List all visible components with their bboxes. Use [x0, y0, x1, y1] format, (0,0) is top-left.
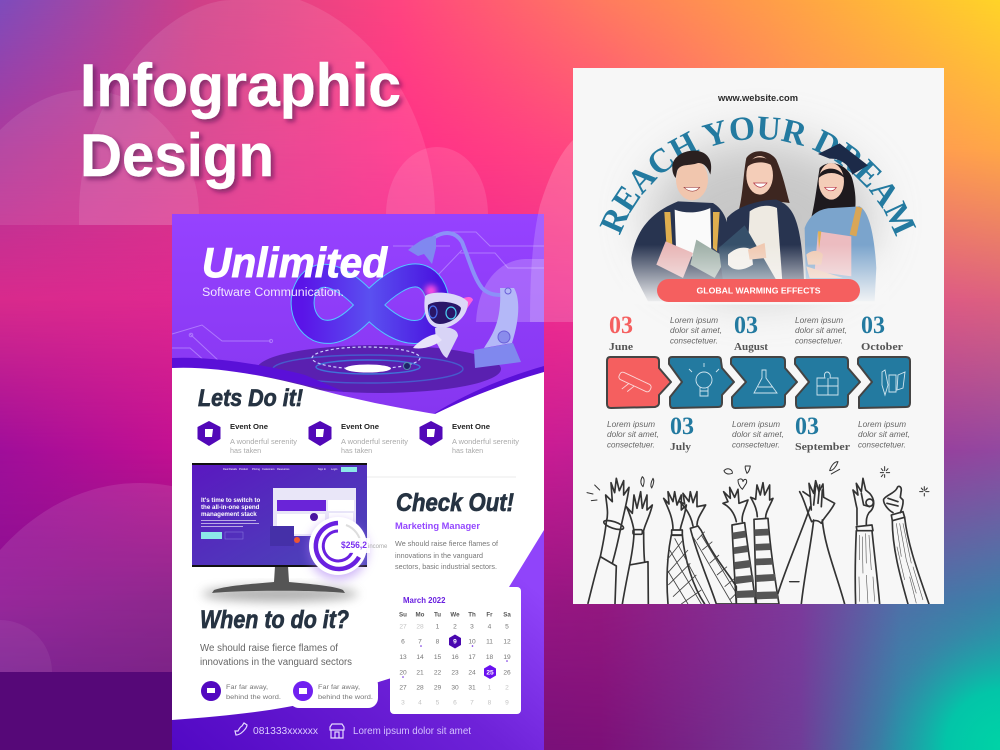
dates: 27 [399, 684, 407, 692]
screen text: Pricing [252, 467, 260, 471]
event two: A wonderful serenity [341, 437, 408, 446]
labels: bottom row: Lorem ipsum [858, 419, 906, 429]
income donut: income [368, 544, 388, 550]
screen text: Customers [262, 467, 275, 471]
dates: 1 [436, 624, 440, 630]
doodles [587, 462, 929, 501]
step: August [731, 357, 797, 408]
weekday header [399, 612, 511, 616]
labels: bottom row: Lorem ipsum [607, 419, 655, 429]
title [80, 52, 401, 189]
circuit lines [172, 232, 544, 362]
translucent arch [476, 259, 544, 322]
dates: 27 [399, 624, 407, 630]
dates: 9 [453, 638, 457, 646]
hand pair one [588, 478, 652, 604]
calendar: March 2022 [403, 596, 446, 605]
translucent arch behind right poster [530, 100, 640, 322]
body text [200, 643, 352, 668]
dates: 31 [468, 684, 476, 692]
photo: three students [623, 143, 890, 305]
subtitle: Software Communication. [202, 287, 344, 299]
labels: top row: dolor sit amet, [670, 325, 722, 335]
wave: dark band right [435, 366, 544, 414]
labels: top row: 03 [609, 312, 633, 339]
screen text: Resources [277, 467, 290, 471]
labels: bottom row: dolor sit amet, [732, 429, 784, 439]
lower left circle [0, 483, 320, 672]
labels: bottom row: 03 [670, 413, 694, 440]
dates: 30 [451, 684, 459, 692]
illustration: hologram platform [257, 345, 501, 393]
event one: Event One [230, 422, 268, 431]
panel: purple footer [172, 530, 544, 750]
hand pair three, striped [723, 483, 779, 604]
heading: check out: Check Out! [396, 489, 514, 517]
labels: bottom row [607, 413, 910, 453]
event three: A wonderful serenity [452, 437, 519, 446]
poster: software flyer [172, 214, 544, 750]
income donut [308, 517, 388, 580]
heading: when to do it: When to do it? [200, 606, 349, 634]
hand: thumbs up [884, 486, 929, 604]
dates: 12 [503, 638, 511, 646]
event two: Event One [341, 422, 379, 431]
event one: has taken [230, 446, 261, 455]
illustration: raised hands [587, 462, 929, 604]
address: Lorem ipsum dolor sit amet [353, 726, 471, 737]
labels: top row: consectetuer. [670, 336, 718, 346]
labels: top row: 03 [734, 312, 758, 339]
photo fade [623, 245, 890, 305]
screen text: It's time to switch to [201, 497, 260, 504]
dates: 6 [453, 700, 457, 706]
dates: 11 [486, 638, 493, 646]
hand pair two, patterned [664, 492, 736, 604]
weekday header: Th [468, 612, 476, 618]
divider [367, 476, 516, 478]
body text [395, 539, 499, 571]
feature pill one: behind the word. [226, 694, 281, 701]
body text: innovations in the vanguard sectors [200, 657, 352, 668]
body text: innovations in the vanguard [395, 551, 483, 560]
illustration: infinity loop [303, 275, 438, 332]
dates: 28 [416, 684, 424, 692]
highlighted dates [449, 634, 461, 648]
body text: sectors, basic industrial sectors. [395, 562, 497, 571]
subheading: Marketing Manager [395, 521, 480, 532]
wave: dark band left [172, 358, 345, 392]
dates: 24 [468, 670, 476, 676]
feature pill one: Far far away, [226, 684, 268, 691]
title: Infographic [80, 52, 401, 119]
labels: bottom row: July [670, 441, 692, 453]
screen text [201, 467, 357, 539]
labels: top row: October [861, 341, 903, 353]
event three [420, 421, 519, 455]
student: left [631, 151, 736, 301]
student: right [805, 143, 876, 301]
labels: top row: consectetuer. [795, 336, 843, 346]
dates: 5 [505, 624, 509, 630]
hand pair four, high five [778, 481, 845, 604]
feature pill two: Far far away, [318, 684, 360, 691]
dates: 3 [470, 624, 474, 630]
dates: 4 [418, 700, 422, 706]
dates: 1 [488, 684, 492, 692]
icon: store [330, 724, 344, 738]
event three: Event One [452, 422, 490, 431]
weekday header: Fr [486, 612, 493, 618]
dates: 6 [401, 638, 405, 646]
illustration: robot [413, 285, 473, 358]
phone number: 081333xxxxxx [253, 725, 319, 737]
wave: white body [172, 368, 544, 416]
dates: 20 [399, 670, 407, 676]
calendar [390, 587, 521, 714]
screen text: Sign In [318, 467, 327, 471]
dates: 13 [399, 654, 407, 661]
timeline [607, 357, 910, 408]
step: September [795, 357, 860, 408]
dates: 25 [486, 670, 494, 676]
labels: bottom row: Lorem ipsum [732, 419, 780, 429]
dates: 17 [468, 654, 476, 661]
screen text: Deal Details [223, 467, 238, 471]
weekday header: We [450, 612, 460, 618]
dates: 29 [434, 684, 441, 692]
step: June [607, 357, 671, 408]
labels: bottom row: consectetuer. [732, 440, 780, 450]
arched title: REACH YOUR DREAM [600, 116, 916, 237]
dates: 19 [503, 654, 511, 661]
dates: 3 [401, 700, 405, 706]
screen text: Login [331, 467, 338, 471]
event three: has taken [452, 446, 483, 455]
dates: 26 [503, 670, 511, 676]
dates: 21 [416, 670, 424, 676]
income donut: $256,2 [341, 540, 367, 551]
labels: top row: August [734, 341, 768, 353]
body text: We should raise fierce flames of [200, 643, 338, 654]
labels: bottom row: dolor sit amet, [607, 429, 659, 439]
dates: 8 [488, 700, 492, 706]
labels: bottom row: consectetuer. [607, 440, 655, 450]
student: middle [719, 151, 805, 301]
feature pill two: behind the word. [318, 694, 373, 701]
step: July [669, 357, 734, 408]
event one [198, 421, 297, 455]
labels: top row [609, 312, 903, 353]
title: Design [80, 122, 274, 189]
hatch [667, 532, 736, 604]
dates: 5 [436, 700, 440, 706]
labels: bottom row: consectetuer. [858, 440, 906, 450]
dates: 2 [453, 624, 457, 630]
screen text: management stack [201, 511, 257, 518]
screen text: Product [239, 467, 248, 471]
title: Unlimited: Unlimited [202, 239, 388, 286]
hand: ok sign [853, 478, 880, 604]
dates: 28 [416, 624, 424, 630]
labels: top row: Lorem ipsum [795, 315, 843, 325]
heading: lets do it: Lets Do it! [198, 385, 303, 412]
dates: 18 [486, 654, 493, 661]
dates: 14 [416, 654, 424, 661]
event two [308, 421, 408, 455]
dates: 23 [451, 670, 459, 676]
banner [657, 279, 860, 302]
labels: bottom row: dolor sit amet, [858, 429, 910, 439]
dates: 7 [418, 638, 422, 646]
fine sleeve lines [859, 523, 923, 603]
weekday header: Tu [434, 612, 441, 618]
dates [399, 624, 511, 706]
monitor [192, 463, 367, 602]
labels: top row: 03 [861, 312, 885, 339]
event one: A wonderful serenity [230, 437, 297, 446]
step: October [858, 357, 910, 408]
dates: 22 [434, 670, 441, 676]
dates: 7 [470, 700, 474, 706]
dates: 15 [434, 654, 441, 661]
banner: GLOBAL WARMING EFFECTS [696, 286, 821, 296]
body text: We should raise fierce flames of [395, 539, 499, 548]
dates: 9 [505, 700, 509, 706]
icon: phone [235, 723, 247, 735]
feature pill one [201, 681, 280, 701]
feature pill two [292, 681, 378, 708]
dates: 4 [488, 624, 492, 630]
illustration: robot arm [408, 233, 521, 368]
arches [0, 0, 488, 225]
photo halo [648, 140, 872, 296]
weekday header: Su [399, 612, 407, 618]
website: www.website.com [717, 93, 798, 103]
event two: has taken [341, 446, 372, 455]
dates: 8 [436, 638, 440, 646]
weekday header: Sa [503, 612, 511, 618]
labels: top row: dolor sit amet, [795, 325, 847, 335]
labels: bottom row: 03 [795, 413, 819, 440]
dates: 16 [451, 654, 459, 661]
poster: reach your dream [573, 68, 944, 604]
dates: 10 [468, 638, 476, 646]
dashboard mockup [270, 488, 356, 546]
panel: purple header [172, 214, 544, 414]
labels: top row: June [609, 341, 633, 353]
weekday header: Mo [416, 612, 425, 618]
dates: 2 [505, 684, 509, 692]
sleeve stripes [732, 529, 779, 599]
labels: top row: Lorem ipsum [670, 315, 718, 325]
screen text: the all-in-one spend [201, 504, 260, 511]
bottom band [0, 672, 180, 750]
labels: bottom row: September [795, 441, 850, 453]
